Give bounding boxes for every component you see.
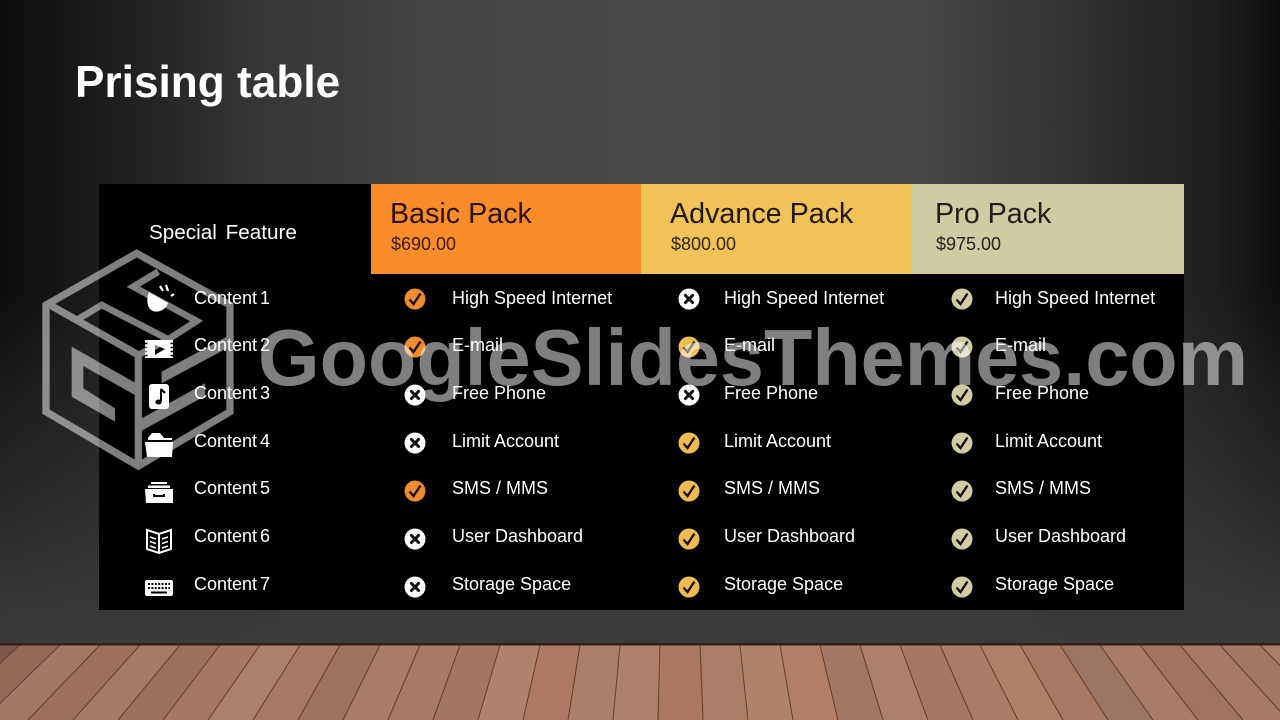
- row 6: [678, 526, 855, 550]
- row 1: High Speed Internet: [995, 288, 1155, 308]
- label: content 6: Content 6: [194, 526, 270, 546]
- label: content 5: Content 5: [194, 478, 270, 498]
- row 4: Limit Account: [452, 431, 559, 451]
- header: advance pack: $800.00: [671, 234, 736, 254]
- row 2: [678, 335, 775, 358]
- label: content 3: Content 3: [194, 383, 270, 403]
- row 2: [404, 335, 503, 358]
- row 7: Storage Space: [724, 574, 843, 594]
- row 4: Limit Account: [995, 431, 1102, 451]
- column: advance pack features: [678, 288, 884, 598]
- row 5: [404, 478, 548, 502]
- row 7: Storage Space: [452, 574, 571, 594]
- row 3: Free Phone: [724, 383, 818, 403]
- row 6: User Dashboard: [724, 526, 855, 546]
- header: advance pack: [641, 184, 912, 274]
- icon: folder: [145, 433, 173, 457]
- header: advance pack: Advance Pack: [670, 198, 854, 230]
- icon: keyboard: [145, 580, 173, 596]
- label: content 4: Content 4: [194, 431, 270, 451]
- row 2: E-mail: [995, 335, 1046, 355]
- row 7: Storage Space: [995, 574, 1114, 594]
- row 6: [404, 526, 583, 550]
- label: content 7: Content 7: [194, 574, 270, 594]
- header: basic pack: [371, 184, 642, 274]
- header: pro pack: $975.00: [936, 234, 1001, 254]
- header: pro pack: [912, 184, 1184, 274]
- row 6: User Dashboard: [452, 526, 583, 546]
- row 4: [404, 431, 559, 454]
- row 7: [404, 574, 571, 598]
- header: pro pack: Pro Pack: [935, 198, 1052, 230]
- column: pro pack features: [952, 288, 1155, 598]
- row 7: [952, 574, 1114, 598]
- row 6: [952, 526, 1126, 550]
- row 3: [952, 383, 1089, 406]
- row 1: High Speed Internet: [452, 288, 612, 308]
- row 3: [678, 383, 818, 406]
- icon: megaphone: [147, 285, 174, 312]
- icon: archive drawer: [145, 482, 173, 503]
- feature column: [145, 285, 270, 596]
- row 3: Free Phone: [452, 383, 546, 403]
- row 5: [952, 478, 1091, 502]
- row 6: User Dashboard: [995, 526, 1126, 546]
- label: content 1: Content 1: [194, 288, 270, 308]
- row 1: High Speed Internet: [724, 288, 884, 308]
- row 4: [678, 431, 831, 454]
- row 2: E-mail: [724, 335, 775, 355]
- row 5: SMS / MMS: [452, 478, 548, 498]
- pricing table: [99, 184, 1184, 610]
- row 5: SMS / MMS: [995, 478, 1091, 498]
- row 3: [404, 383, 546, 406]
- watermark logo cube: [46, 253, 230, 466]
- table panel: [99, 184, 1184, 610]
- watermark text: GoogleSlidesThemes.com: [258, 313, 1248, 402]
- icon: music file: [149, 384, 169, 409]
- header: special feature: Special Feature: [149, 221, 297, 244]
- header: basic pack: $690.00: [391, 234, 456, 254]
- row 5: SMS / MMS: [724, 478, 820, 498]
- header: basic pack: Basic Pack: [390, 198, 533, 230]
- title: Prising table: [75, 58, 340, 107]
- wooden floor: [0, 643, 1280, 720]
- row 5: [678, 478, 820, 502]
- row 2: [952, 335, 1046, 358]
- icon: film strip: [145, 340, 173, 358]
- icon: open book: [147, 530, 171, 553]
- watermark: [46, 253, 1248, 466]
- row 7: [678, 574, 843, 598]
- row 4: Limit Account: [724, 431, 831, 451]
- row 4: [952, 431, 1102, 454]
- row 2: E-mail: [452, 335, 503, 355]
- label: content 2: Content 2: [194, 335, 270, 355]
- row 3: Free Phone: [995, 383, 1089, 403]
- column: basic pack features: [404, 288, 612, 598]
